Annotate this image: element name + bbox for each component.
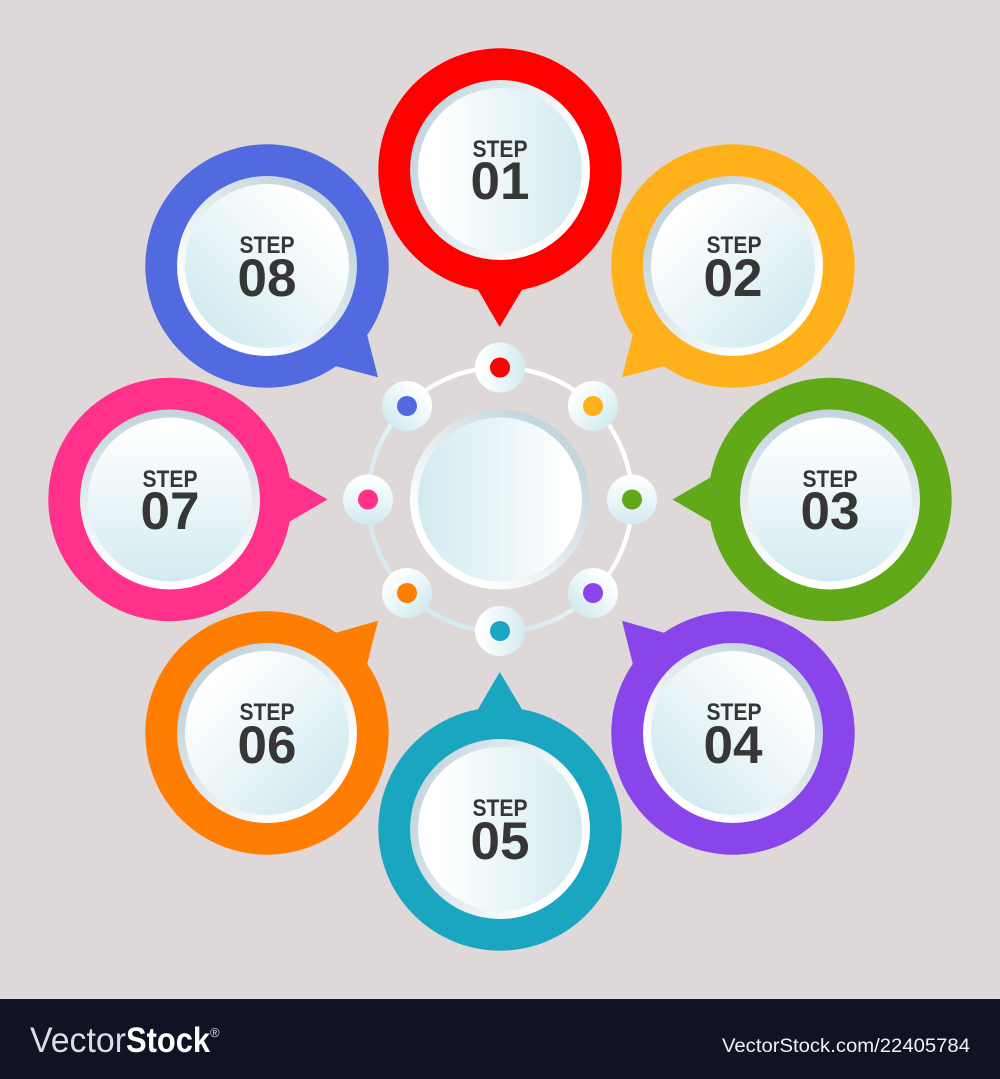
pin shape: blue bbox=[145, 144, 389, 388]
label: step 04: 04 bbox=[704, 716, 763, 775]
center disc bbox=[410, 410, 590, 590]
step 02 bubble bbox=[611, 144, 855, 388]
pin shape: red bbox=[378, 48, 622, 327]
footer bar bbox=[0, 999, 1000, 1079]
central hub bbox=[343, 342, 657, 656]
label: step 03: STEP bbox=[802, 466, 858, 493]
footer logo bbox=[30, 1021, 220, 1060]
step 03 bubble bbox=[672, 378, 952, 621]
label: step 06: STEP bbox=[240, 699, 294, 726]
footer image id: VectorStock.com/22405784 bbox=[722, 1035, 970, 1057]
pin shape: orange bbox=[145, 611, 389, 855]
label: step 05: STEP bbox=[472, 795, 528, 822]
label: step 07: 07 bbox=[140, 482, 200, 541]
label: step 01: 01 bbox=[470, 152, 530, 211]
footer logo: Vector bbox=[30, 1021, 126, 1060]
label: step 08: STEP bbox=[240, 232, 294, 259]
step 05 bubble bbox=[378, 672, 622, 951]
label: step 06: 06 bbox=[238, 716, 296, 775]
connecting ring bbox=[368, 368, 632, 632]
label: step 07: STEP bbox=[142, 466, 198, 493]
node: blue bbox=[382, 381, 432, 431]
label: step 02: 02 bbox=[704, 249, 762, 308]
label: step 01: STEP bbox=[472, 136, 528, 163]
node: purple bbox=[568, 568, 618, 618]
node: red bbox=[475, 342, 525, 392]
node: green bbox=[607, 474, 657, 524]
label: step 08: 08 bbox=[238, 249, 296, 308]
label: step 04: STEP bbox=[706, 699, 762, 726]
step 01 bubble bbox=[378, 48, 622, 327]
node: teal bbox=[475, 606, 525, 656]
step 07 bubble bbox=[48, 378, 327, 621]
node: pink bbox=[343, 474, 393, 524]
footer logo: ® bbox=[210, 1025, 220, 1040]
pin shape: amber bbox=[611, 144, 855, 388]
pin shape: pink bbox=[48, 378, 327, 621]
node: orange bbox=[382, 568, 432, 618]
label: step 05: 05 bbox=[470, 812, 530, 871]
pin shape: teal bbox=[378, 672, 622, 951]
step 08 bubble bbox=[145, 144, 389, 388]
node: amber bbox=[568, 381, 618, 431]
step 06 bubble bbox=[145, 611, 389, 855]
pin shape: green bbox=[672, 378, 952, 621]
pin shape: purple bbox=[611, 611, 855, 855]
label: step 02: STEP bbox=[706, 232, 762, 259]
label: step 03: 03 bbox=[800, 482, 860, 541]
step 04 bubble bbox=[611, 611, 855, 855]
footer logo: Stock bbox=[126, 1021, 210, 1060]
